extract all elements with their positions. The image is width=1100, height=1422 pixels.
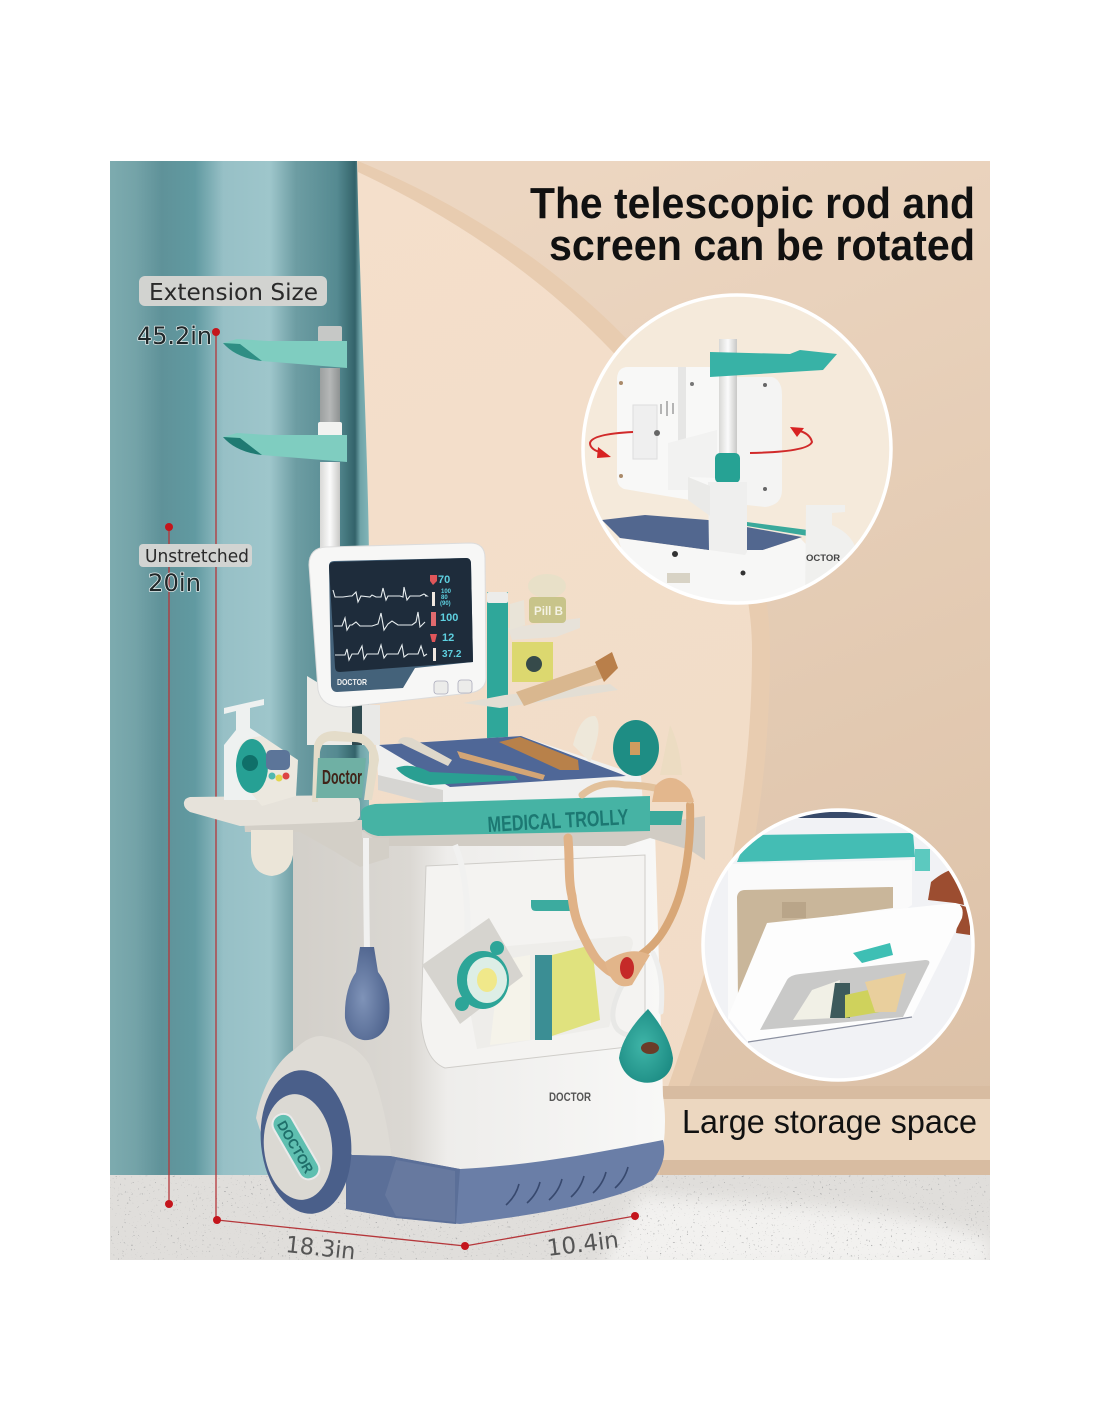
label: 18.3in: 18.3in xyxy=(284,1232,357,1265)
cuff hose and bulb xyxy=(345,838,390,1040)
circle outline 2 xyxy=(703,810,973,1080)
ECG traces xyxy=(333,587,427,660)
curtain xyxy=(110,161,369,1175)
rotation arrow left xyxy=(590,432,633,453)
wheel brand badge xyxy=(269,1110,323,1183)
monitor readings: (90) xyxy=(440,601,451,607)
callout circle: storage xyxy=(700,808,975,1083)
left shelf xyxy=(184,699,389,876)
heading: screen can be rotated xyxy=(549,221,975,270)
trolley body xyxy=(254,830,665,1224)
rim lettering: MEDICAL TROLLY xyxy=(487,804,629,837)
monitor brand: DOCTOR xyxy=(337,677,367,687)
monitor readings: 70 xyxy=(438,574,450,586)
pressure device xyxy=(236,736,298,806)
door panel xyxy=(728,903,963,1042)
monitor readings xyxy=(438,574,462,660)
hanger arm upper xyxy=(223,339,347,368)
shelf upper xyxy=(508,618,580,640)
telescopic rod xyxy=(223,326,347,552)
under rim shelf xyxy=(361,816,705,860)
hanger arm lower xyxy=(223,433,347,462)
monitor xyxy=(309,543,486,707)
label: extension size: Extension Size xyxy=(149,280,318,306)
roll under shelf xyxy=(251,830,293,876)
cabinet interior xyxy=(737,887,893,1000)
heading: The telescopic rod and xyxy=(530,179,975,228)
little doctor sign xyxy=(312,731,379,802)
chest piece xyxy=(619,1009,673,1083)
small bottle xyxy=(806,505,854,569)
door leaflet xyxy=(468,936,633,1049)
leaflet box xyxy=(512,642,553,682)
little doctor sign: Doctor xyxy=(322,767,362,789)
tools xyxy=(398,737,452,766)
caption: storage: Large storage space xyxy=(682,1103,977,1140)
vent slots xyxy=(506,1167,628,1205)
callout circle: rotating screen xyxy=(583,295,891,610)
label: 20in: 20in xyxy=(148,569,201,597)
measurement lines xyxy=(165,328,639,1250)
lower body xyxy=(618,538,806,602)
side post and shelves: Pill B xyxy=(534,604,563,618)
wheel xyxy=(254,1066,358,1218)
arm xyxy=(710,350,837,377)
wheel arch xyxy=(256,1036,392,1200)
screen rear right xyxy=(737,377,782,507)
callout circle: rotating screen: OCTOR xyxy=(806,553,840,564)
shelf lower xyxy=(463,684,618,708)
label: 10.4in: 10.4in xyxy=(546,1227,620,1262)
rotation arrow right xyxy=(750,431,812,453)
heading xyxy=(530,179,975,270)
gauge with hose xyxy=(422,845,523,1024)
tray xyxy=(602,515,802,550)
rod xyxy=(719,339,737,459)
circle outline 1 xyxy=(583,295,891,603)
floor shadow xyxy=(606,1194,990,1260)
wheel brand badge: DOCTOR xyxy=(274,1118,317,1176)
monitor readings: 80 xyxy=(441,595,448,601)
teal rim xyxy=(361,796,650,836)
otoscope and funnel xyxy=(573,716,694,802)
window with leaflets xyxy=(760,960,929,1030)
monitor readings: 100 xyxy=(440,612,458,624)
door handle xyxy=(531,900,572,911)
drawer door xyxy=(421,855,645,1068)
mount bracket xyxy=(307,676,380,745)
body brand: DOCTOR xyxy=(549,1092,592,1104)
label: 45.2in: 45.2in xyxy=(137,322,212,350)
soap bottle xyxy=(224,699,276,800)
blue base xyxy=(346,1140,664,1224)
tray and rim xyxy=(361,736,705,860)
label: unstretched: Unstretched xyxy=(145,546,249,567)
screen rear left xyxy=(617,367,720,500)
stethoscope xyxy=(568,784,690,1083)
wall arc xyxy=(358,161,770,1165)
side post and shelves xyxy=(463,574,618,742)
monitor readings: 100 xyxy=(441,589,452,595)
panel: room background xyxy=(110,161,990,1270)
pill bottle xyxy=(528,574,566,598)
monitor readings: 37.2 xyxy=(442,649,462,660)
wooden roller xyxy=(516,664,603,706)
monitor readings: 12 xyxy=(442,632,454,644)
monitor buttons xyxy=(434,680,472,694)
baseboard xyxy=(660,1086,990,1175)
door handle xyxy=(853,943,893,963)
hand xyxy=(928,868,970,935)
